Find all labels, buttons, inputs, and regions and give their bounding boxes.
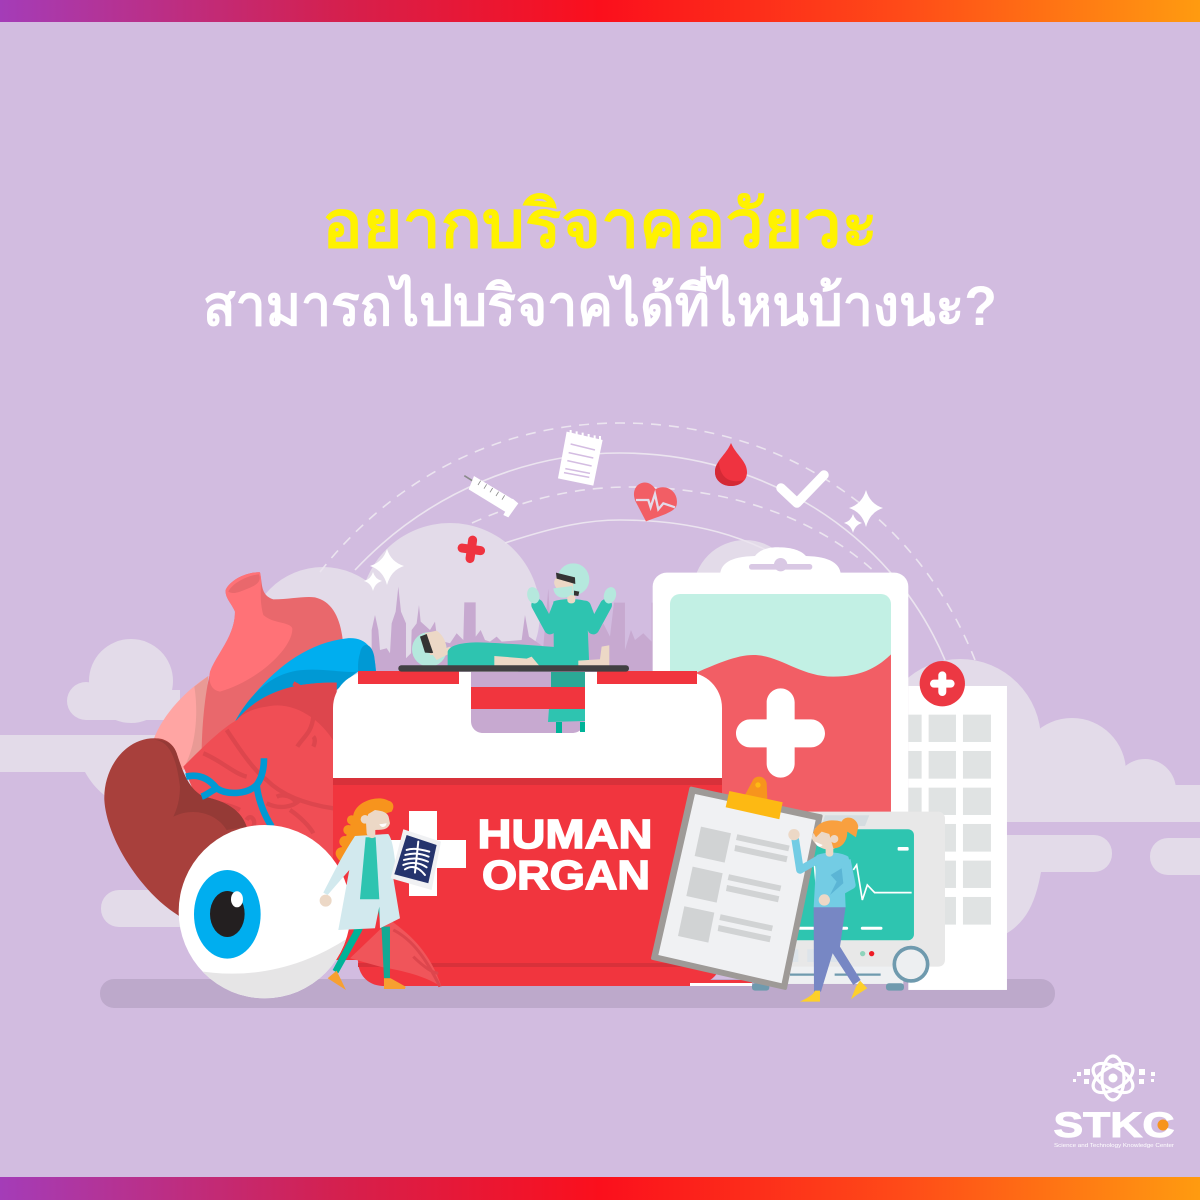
woman shirt fold xyxy=(830,868,843,895)
coronary veins xyxy=(200,683,337,833)
icon: red cross xyxy=(461,539,482,560)
bag cross xyxy=(736,688,825,778)
logo dot xyxy=(1158,1120,1168,1130)
blue vessel shade xyxy=(235,670,357,722)
pupil xyxy=(210,891,245,937)
woman lower arm xyxy=(830,860,852,897)
box red body xyxy=(333,778,722,986)
hospital building xyxy=(908,661,1007,990)
windows xyxy=(908,715,991,925)
monitor buttons xyxy=(788,949,798,962)
dashed and solid arcs xyxy=(320,423,975,660)
monitor base xyxy=(787,953,903,984)
clipboard clip xyxy=(726,791,783,819)
patient blanket xyxy=(448,642,580,667)
aorta opening xyxy=(228,574,260,593)
table xyxy=(398,665,629,672)
clipboard hook xyxy=(745,777,767,799)
blood bag xyxy=(653,547,908,839)
eyeball xyxy=(179,825,353,1007)
heart monitor xyxy=(752,812,945,991)
surgeon gloves xyxy=(525,586,541,605)
box red strap left xyxy=(358,671,459,684)
bag inner xyxy=(670,594,891,821)
title line 1: อยากบริจาคอวัยวะ xyxy=(322,187,878,261)
doctor hair back xyxy=(336,798,393,863)
doctor shoes xyxy=(328,971,406,990)
patient hair xyxy=(420,634,433,653)
surgeon neck xyxy=(567,592,575,603)
monitor body xyxy=(783,812,945,967)
top gradient bar xyxy=(0,0,1200,22)
monitor feet xyxy=(752,983,769,991)
ecg line xyxy=(814,860,912,900)
heart body xyxy=(183,683,337,940)
document blocks xyxy=(678,827,790,943)
hanger slot xyxy=(749,558,812,571)
blood level xyxy=(680,654,891,820)
doctor coat xyxy=(323,834,400,930)
box red strap right xyxy=(597,671,697,684)
surgeon legs in handle xyxy=(548,672,585,733)
surgeon face xyxy=(554,577,573,593)
box bottom shade line xyxy=(358,963,722,967)
woman smile xyxy=(815,842,823,847)
doctor smile xyxy=(379,823,387,827)
surgeon cap xyxy=(557,563,589,595)
box handle strap xyxy=(471,687,585,709)
woman legs xyxy=(814,907,861,992)
woman neck xyxy=(826,845,833,857)
doctor hand xyxy=(320,895,332,907)
strip under box xyxy=(690,980,752,986)
doctor neck and face xyxy=(366,810,390,838)
surgeon hair xyxy=(556,573,579,596)
logo wordmark: STKC xyxy=(1054,1106,1174,1145)
blue vessel xyxy=(235,638,376,722)
title line 2: สามารถไปบริจาคได้ที่ไหนบ้างนะ? xyxy=(203,266,997,337)
monitor screen xyxy=(780,829,914,940)
label HUMAN: HUMAN xyxy=(478,811,652,857)
clouds background xyxy=(0,523,1200,937)
icon: heart xyxy=(634,482,677,521)
doctor with x-ray xyxy=(320,798,441,990)
eye and liver xyxy=(104,738,353,1007)
patient feet xyxy=(578,645,609,667)
eye shade xyxy=(203,939,346,998)
box label xyxy=(478,811,652,898)
x-ray film xyxy=(394,835,437,883)
woman in blue xyxy=(788,818,867,1002)
surgery scene xyxy=(398,563,629,672)
woman raised arm xyxy=(795,840,820,870)
woman hand low xyxy=(819,894,830,906)
icon: sparkles left xyxy=(364,549,404,591)
blue veins xyxy=(186,758,272,827)
monitor top vent xyxy=(822,815,869,826)
liver shade xyxy=(148,740,247,830)
bottom gradient bar xyxy=(0,1177,1200,1200)
hospital red sign xyxy=(920,661,965,706)
woman head xyxy=(812,828,835,850)
monitor dial xyxy=(894,948,928,981)
title xyxy=(203,187,997,337)
icon: check mark xyxy=(781,475,824,503)
patient arm xyxy=(494,656,540,667)
woman hair xyxy=(813,818,858,848)
patient cap xyxy=(412,632,447,667)
icon: blood drop xyxy=(715,443,747,486)
surgeon arms xyxy=(537,605,606,628)
bag body xyxy=(653,573,908,839)
icon: syringe xyxy=(464,476,518,517)
doctor scrubs xyxy=(360,837,379,899)
patient xyxy=(398,631,629,672)
ground shadow xyxy=(100,979,1055,1008)
logo pixels xyxy=(1073,1069,1155,1084)
logo tagline: Science and Technology Knowledge Center xyxy=(1054,1143,1174,1149)
iris xyxy=(194,870,261,959)
woman torso xyxy=(814,853,855,907)
x-ray frame xyxy=(391,829,441,890)
heart lower tip over box xyxy=(350,920,442,987)
eye highlight xyxy=(231,891,243,907)
woman hand up xyxy=(788,829,800,840)
heart pale back xyxy=(153,676,208,770)
patient hand xyxy=(432,647,453,660)
floating icons xyxy=(461,430,677,560)
logo atom xyxy=(1088,1056,1138,1100)
medical box xyxy=(333,672,722,986)
surgeon xyxy=(525,563,618,667)
STKC logo xyxy=(1054,1056,1174,1149)
handle cutout xyxy=(471,672,585,733)
surgeon torso xyxy=(553,599,589,667)
doctor legs xyxy=(333,898,375,973)
woman ear xyxy=(830,835,838,843)
label ORGAN: ORGAN xyxy=(482,852,650,898)
clipboard board xyxy=(653,788,821,988)
icon: notepad xyxy=(558,430,603,486)
liver xyxy=(104,738,247,918)
bag hanger tab xyxy=(720,547,841,577)
surgeon mask xyxy=(553,586,572,598)
white cross on box xyxy=(380,811,466,896)
clipboard xyxy=(653,777,821,988)
icon: sparkles right xyxy=(844,490,883,533)
heart xyxy=(153,572,376,940)
aorta xyxy=(202,572,343,757)
clipboard paper xyxy=(658,794,816,983)
city skyline xyxy=(372,587,658,672)
patient face xyxy=(425,631,446,655)
lid shadow xyxy=(333,778,722,785)
woman shoes xyxy=(800,981,867,1002)
aorta highlight xyxy=(209,572,292,692)
box white lid xyxy=(333,672,722,778)
heart upper shade xyxy=(237,683,337,747)
x-ray ribs xyxy=(403,842,429,875)
